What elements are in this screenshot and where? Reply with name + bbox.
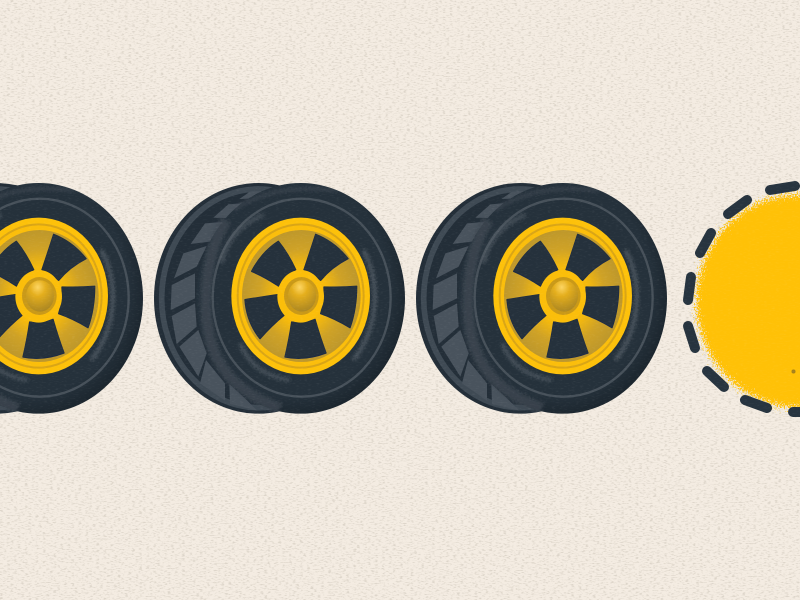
paint fleck — [792, 370, 796, 374]
tyre: right — [416, 183, 667, 414]
yellow paint blob: missing tyre — [696, 194, 800, 408]
dashed tyre outline — [688, 186, 800, 412]
tyre: centre — [154, 183, 405, 414]
tyre: left, cropped by the page edge — [0, 183, 143, 414]
